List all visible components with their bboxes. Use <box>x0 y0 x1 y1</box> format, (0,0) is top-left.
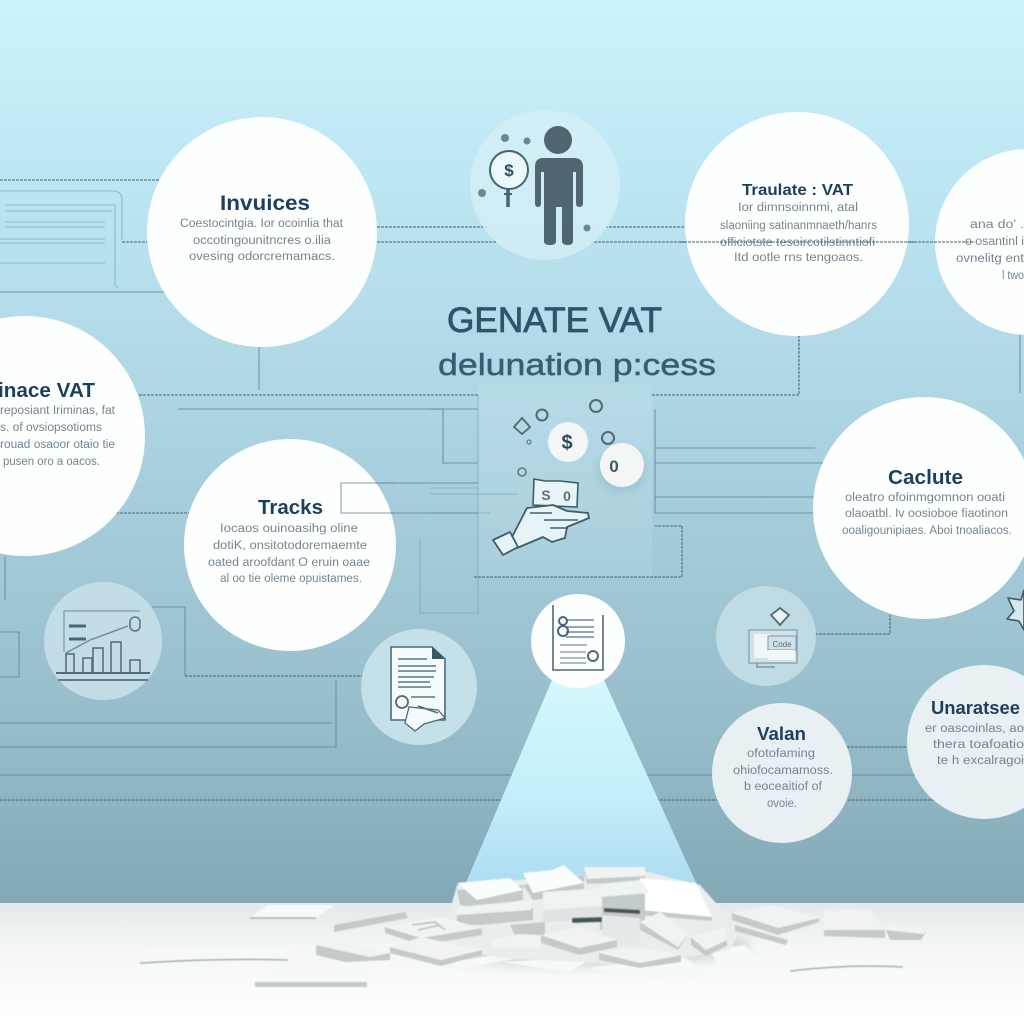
circle: Invoices <box>147 117 377 347</box>
icon: hand <box>493 505 589 555</box>
icon: person <box>535 126 583 245</box>
body text: Translate VAT: Itd ootle rns tengoaos. <box>734 252 863 264</box>
icon: signed document <box>391 647 445 731</box>
loose sheets <box>140 905 903 987</box>
circle: person with magnifier <box>470 110 620 260</box>
body text: right partial: ana do' . <box>970 219 1024 231</box>
body text: Unratsee: er oascoinlas, ao <box>925 723 1024 735</box>
circle: Tracks <box>184 439 396 651</box>
connector lines <box>0 180 1024 800</box>
body text: Invoices: ovesing odorcremamacs. <box>189 251 335 263</box>
body text: Invoices: occotingounitncres o.ilia <box>193 235 332 247</box>
body text: Unratsee: thera toafoatio <box>933 739 1024 751</box>
heading: Translate VAT: Traulate : VAT <box>742 182 853 199</box>
body text: Finance VAT: s. of ovsiopsotioms <box>0 422 102 434</box>
body text: Invoices: Coestocintgia. Ior ocoinlia that <box>180 218 344 230</box>
body text: Translate VAT: officiotste tesoircotilstinntiofi <box>720 237 875 249</box>
body text: Tracks <box>208 523 370 585</box>
body text: Validation: ofotofaming <box>747 748 815 760</box>
body text: Validation: ohiofocamamoss. <box>733 765 833 777</box>
body text: Tracks: Iocaos ouinoasihg oline <box>220 523 358 535</box>
body text: Calculate: olaoatbl. Iv oosioboe fiaotinon <box>845 508 1008 520</box>
icon: magnifier with dollar: $ <box>504 161 514 180</box>
circle: Translate VAT <box>680 112 914 336</box>
circle: Calculate <box>813 397 1024 619</box>
body text: right partial: ovnelitg ent <box>956 253 1024 265</box>
body text: Finance VAT: rouad osaoor otaio tie <box>0 439 115 451</box>
body text: Validation: b eoceaitiof of <box>744 781 823 793</box>
body text: Calculate: ooaligounipiaes. Aboi tnoaliacos. <box>842 525 1012 537</box>
circle: center document <box>531 594 625 688</box>
floor <box>0 903 1024 1024</box>
body text: Finance VAT <box>0 405 116 468</box>
icon: coins <box>514 400 646 492</box>
circle: Unratsee <box>907 665 1024 819</box>
body text: Finance VAT: pusen oro a oacos. <box>3 456 100 468</box>
paper blocks <box>316 865 926 968</box>
title: delunation p:cess <box>438 347 716 382</box>
body text: Translate VAT: Ior dimnsoinnmi, atal <box>738 202 858 214</box>
circle: right partial <box>934 149 1024 335</box>
icon: star partial <box>1007 590 1024 630</box>
icon: monitor: Code <box>772 640 792 649</box>
paper pile <box>140 865 926 987</box>
heading: Calculate: Caclute <box>888 467 963 489</box>
body text: Unratsee <box>925 723 1024 767</box>
icon: bar chart <box>56 611 150 680</box>
icon: banknote <box>533 479 578 507</box>
body text: Unratsee: te h excalragoi <box>937 755 1024 767</box>
heading: Validation: Valan <box>757 724 806 744</box>
title <box>438 301 716 382</box>
icon: banknote: S <box>541 487 551 503</box>
circle: chart icon <box>44 582 162 700</box>
body text: right partial: o osantinl i <box>965 236 1024 248</box>
floor shadow <box>410 923 750 967</box>
heading: Unratsee: Unaratsee <box>931 697 1020 718</box>
body text: right partial <box>956 219 1024 282</box>
body text: Validation: ovoie. <box>767 798 797 810</box>
body text: Tracks: dotiK, onsitotodoremaemte <box>213 540 367 552</box>
body text: Invoices <box>180 218 344 263</box>
circle: document icon <box>361 629 477 745</box>
icon: coins: $ <box>561 432 573 454</box>
icon: magnifier with dollar <box>478 134 590 232</box>
heading: Tracks: Tracks <box>258 497 323 519</box>
circle: Validation <box>712 703 852 843</box>
icon: coins: 0 <box>609 457 619 476</box>
body text: Validation <box>733 748 833 810</box>
icon: banknote: 0 <box>563 488 571 504</box>
body text: Finance VAT: reposiant Iriminas, fat <box>0 405 116 417</box>
title: GENATE VAT <box>447 301 662 340</box>
heading: Finance VAT: inace VAT <box>0 380 95 402</box>
body text: Calculate <box>842 492 1012 537</box>
icon: center money hand <box>493 400 646 555</box>
pile mass <box>440 870 740 965</box>
body text: Calculate: oleatro ofoinmgomnon ooati <box>845 492 1005 504</box>
circle: monitor icon <box>716 586 816 686</box>
body text: Translate VAT: slaoniing satinanmnaeth/hanrs <box>720 220 877 232</box>
body text: Tracks: al oo tie oleme opuistames. <box>220 573 362 585</box>
body text: Translate VAT <box>720 202 877 264</box>
light beam <box>465 680 697 885</box>
circle: Finance VAT <box>0 316 145 556</box>
heading: Invoices: Invuices <box>220 192 310 215</box>
center panel backdrop <box>478 385 652 577</box>
icon: form document <box>553 605 603 670</box>
body text: Tracks: oated aroofdant O eruin oaae <box>208 557 370 569</box>
